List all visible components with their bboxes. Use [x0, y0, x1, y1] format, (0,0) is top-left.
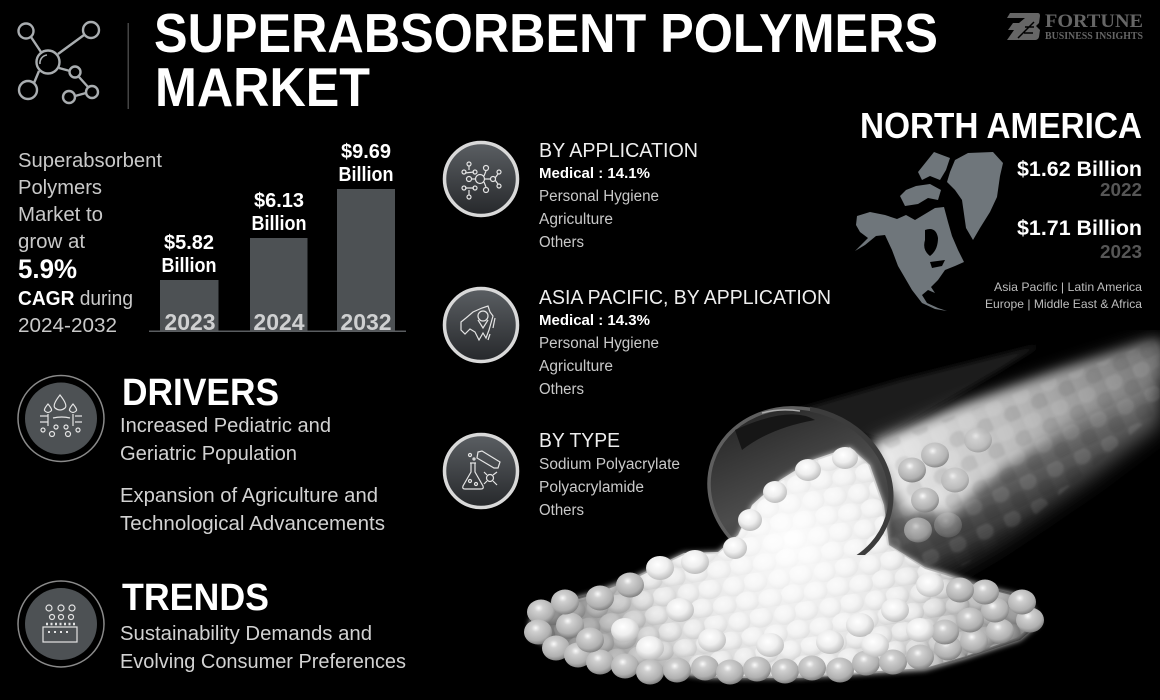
- text: CAGR statement: [18, 150, 162, 337]
- bar chart: Billion: [338, 164, 394, 186]
- text: CAGR statement: 2024-2032: [18, 315, 117, 337]
- heading: north america: NORTH AMERICA: [860, 105, 1142, 146]
- text: CAGR statement: Market to: [18, 204, 103, 226]
- text: asia pacific by application: Medical : 14.3%: [539, 312, 650, 329]
- icon: trends: [18, 581, 104, 667]
- icon: by application: [444, 142, 518, 216]
- text: by application: [539, 139, 698, 251]
- bar chart: $6.13: [254, 190, 304, 212]
- bar chart: Billion: [252, 213, 306, 235]
- title: SUPERABSORBENT POLYMERS: [154, 2, 938, 64]
- text: north america values: Europe | Middle East & Africa: [985, 297, 1142, 311]
- text: CAGR statement: 5.9%: [18, 254, 77, 284]
- rim over beads: [810, 406, 894, 555]
- title: [154, 2, 938, 118]
- text: by type: Sodium Polyacrylate: [539, 456, 680, 473]
- logo: Fortune Business Insights: FORTUNE: [1045, 11, 1143, 32]
- text: north america values: $1.62 Billion: [1017, 157, 1142, 181]
- text: by type: [539, 429, 680, 519]
- text: asia pacific by application: Others: [539, 381, 584, 398]
- text: by application: Personal Hygiene: [539, 188, 659, 205]
- icon: asia pacific: [444, 288, 518, 362]
- bar chart: [149, 141, 406, 335]
- logo: Fortune Business Insights: [1007, 11, 1143, 42]
- text: CAGR statement: Superabsorbent: [18, 150, 162, 172]
- text: by type: Polyacrylamide: [539, 479, 644, 496]
- text: CAGR statement: grow at: [18, 231, 85, 253]
- text: asia pacific by application: Agriculture: [539, 358, 613, 375]
- text: trends: [120, 577, 406, 673]
- text: drivers: DRIVERS: [122, 372, 279, 414]
- title: MARKET: [155, 56, 370, 118]
- icon: drivers: [18, 376, 104, 462]
- text: by type: BY TYPE: [539, 429, 620, 452]
- header divider: [128, 23, 129, 109]
- text: north america values: [985, 157, 1142, 311]
- text: asia pacific by application: Personal Hygiene: [539, 335, 659, 352]
- map: north america: [855, 152, 1003, 311]
- tube body: [790, 340, 1160, 600]
- text: by type: Others: [539, 502, 584, 519]
- text: north america values: Asia Pacific | Latin America: [994, 280, 1142, 294]
- icon: by type flask: [444, 434, 518, 508]
- text: drivers: Increased Pediatric and: [120, 415, 331, 437]
- bar chart: 2032: [340, 309, 392, 335]
- text: by application: BY APPLICATION: [539, 139, 698, 162]
- bar chart: Billion: [162, 255, 216, 277]
- bar chart: $5.82: [164, 232, 214, 254]
- logo: Fortune Business Insights: BUSINESS INSIGHTS: [1045, 31, 1143, 42]
- text: trends: Evolving Consumer Preferences: [120, 651, 406, 673]
- text: north america values: $1.71 Billion: [1017, 216, 1142, 240]
- text: drivers: [120, 372, 385, 535]
- text: trends: TRENDS: [122, 577, 269, 619]
- text: north america values: 2022: [1100, 180, 1142, 200]
- text: by application: Others: [539, 234, 584, 251]
- text: drivers: Expansion of Agriculture and: [120, 485, 378, 507]
- text: drivers: Geriatric Population: [120, 443, 297, 465]
- bar chart: $9.69: [341, 141, 391, 163]
- bar chart: 2024: [253, 309, 305, 335]
- text: drivers: Technological Advancements: [120, 513, 385, 535]
- bar chart: 2023: [164, 309, 216, 335]
- text: CAGR statement: Polymers: [18, 177, 102, 199]
- illustration: test tube with spilled polymer beads: [524, 340, 1160, 684]
- icon: molecule network: [18, 22, 99, 103]
- text: asia pacific by application: ASIA PACIFIC, BY APPLICATION: [539, 286, 831, 309]
- text: trends: Sustainability Demands and: [120, 623, 372, 645]
- text: asia pacific by application: [539, 286, 831, 398]
- text: by application: Medical : 14.1%: [539, 165, 650, 182]
- tube opening: [686, 383, 914, 597]
- text: CAGR statement: CAGR during: [18, 288, 133, 310]
- text: north america values: 2023: [1100, 242, 1142, 262]
- bead pile: [524, 447, 1044, 684]
- text: by application: Agriculture: [539, 211, 613, 228]
